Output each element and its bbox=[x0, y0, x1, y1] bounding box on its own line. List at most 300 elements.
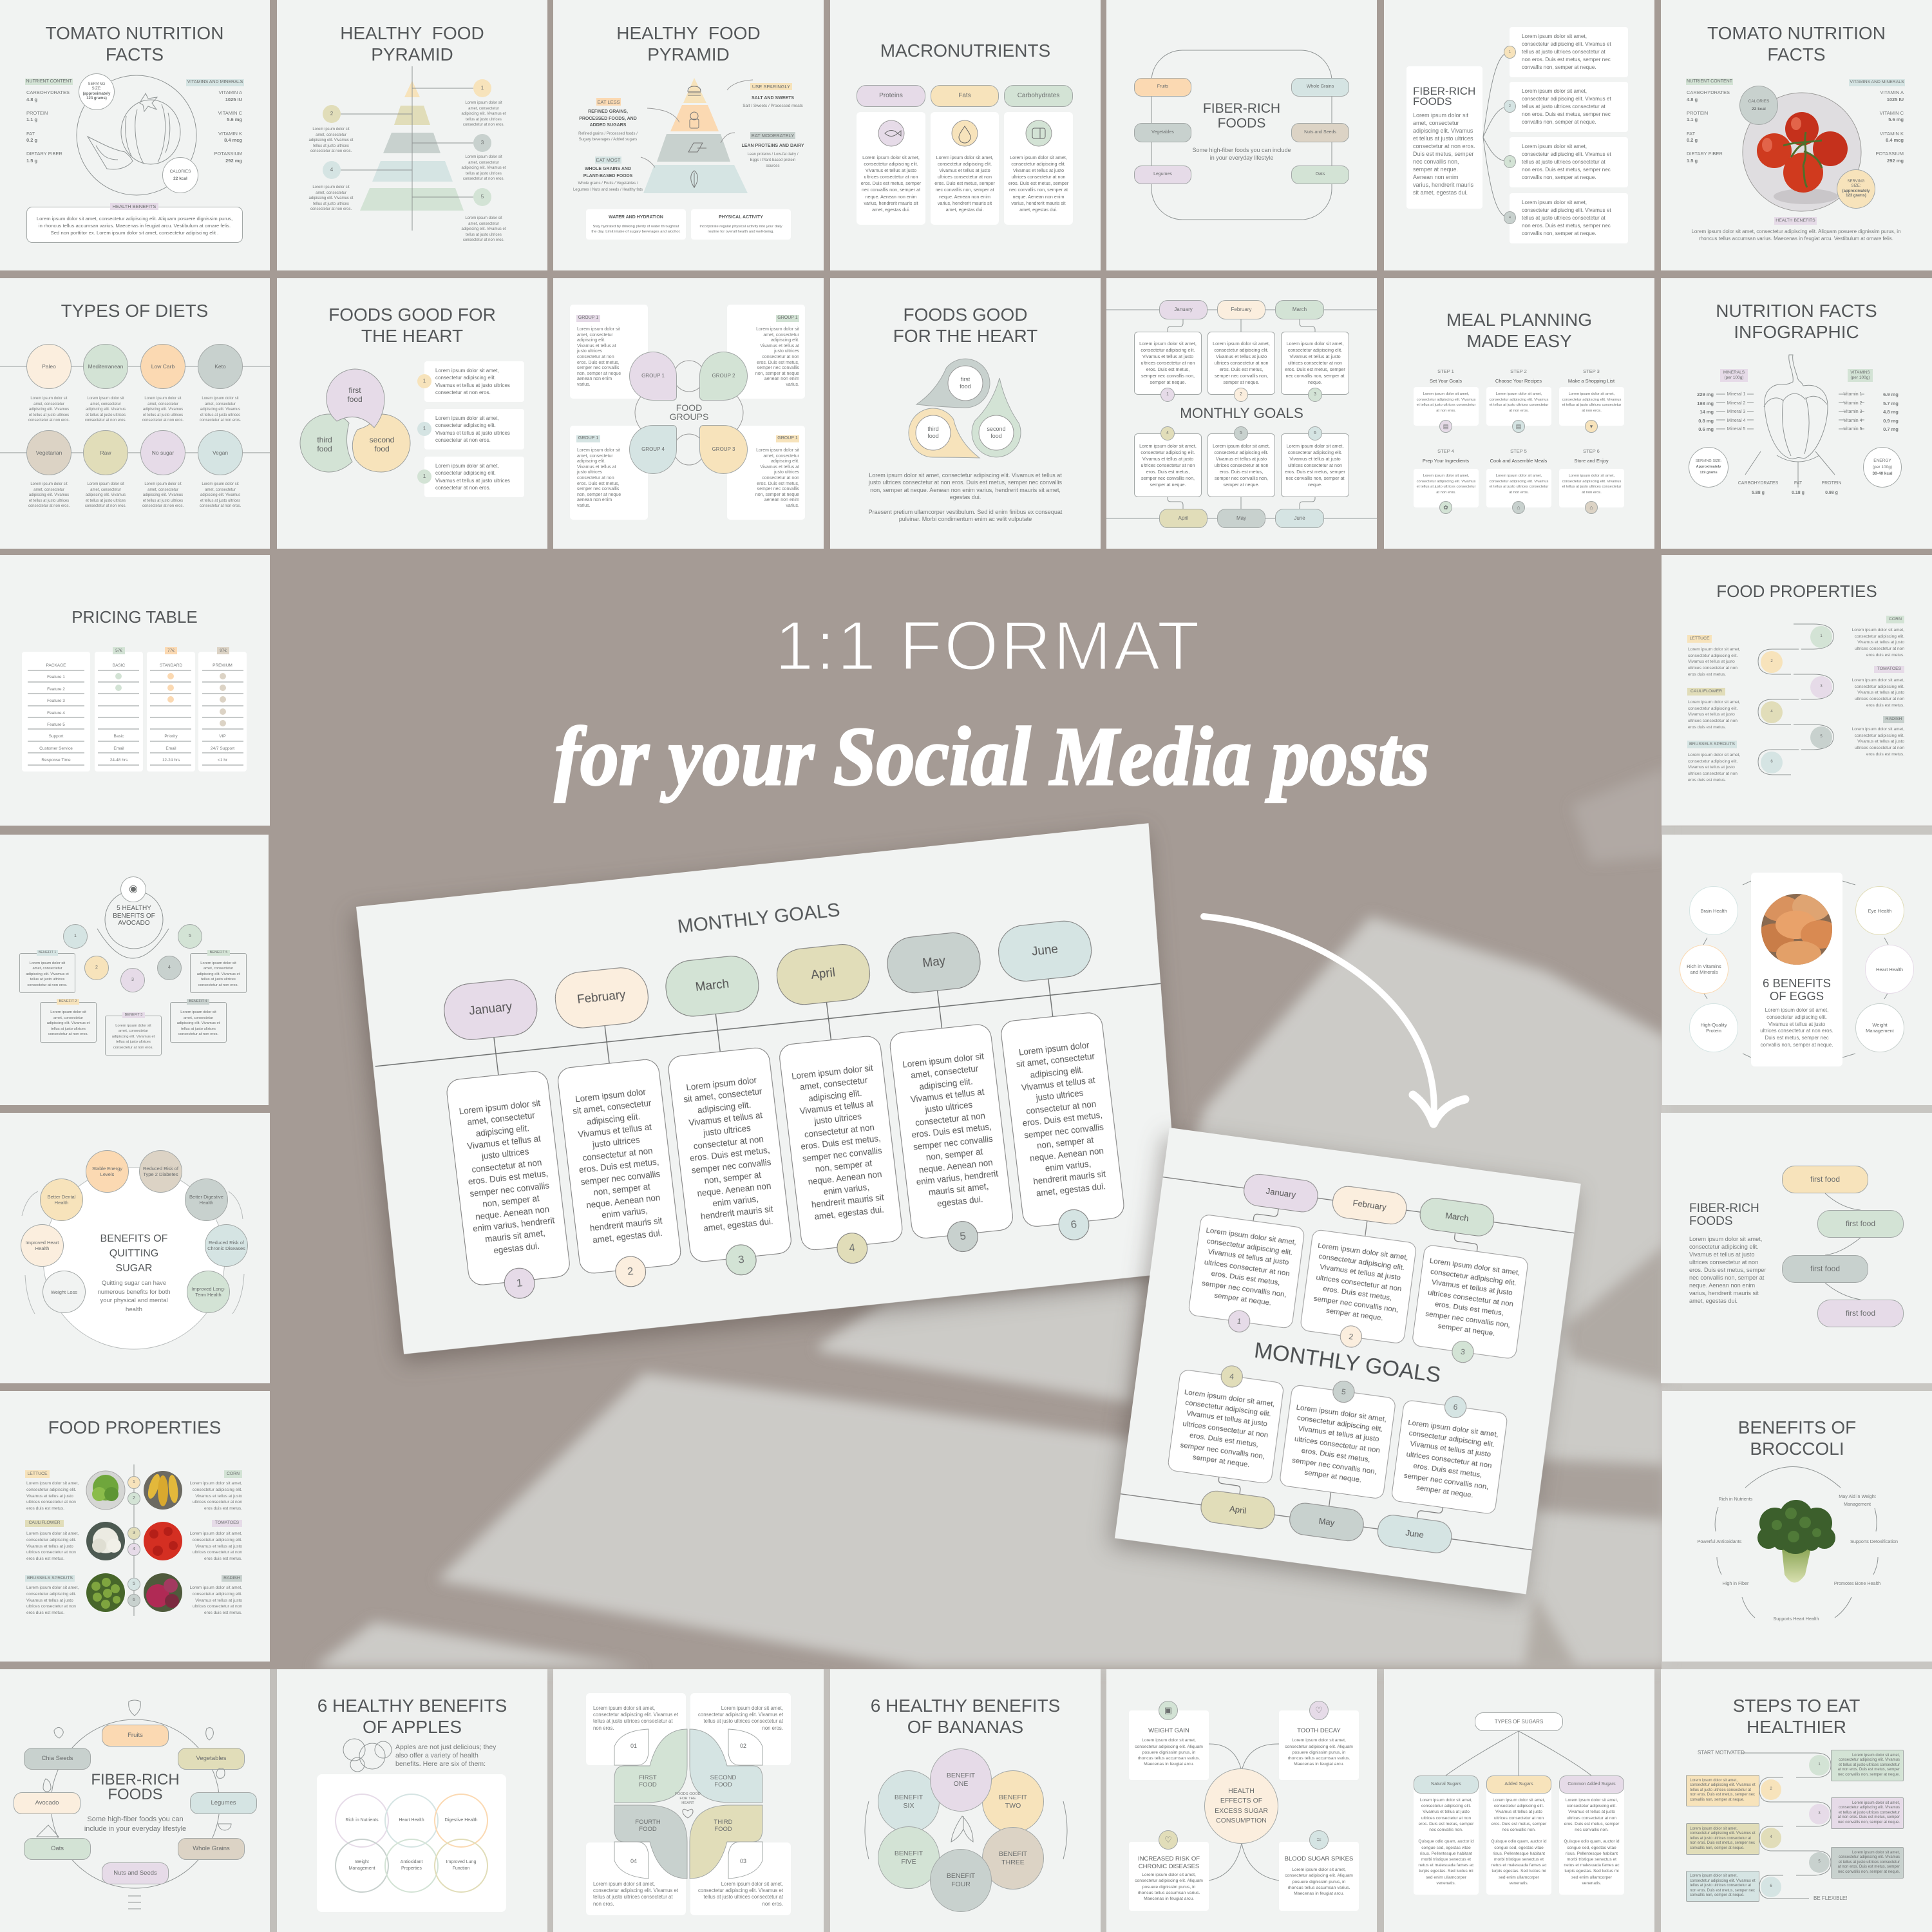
panel: fiber-rich foods cards: convallis non, semper at neque. bbox=[1522, 175, 1596, 180]
month pills: January bbox=[1174, 307, 1193, 312]
health benefits box bbox=[26, 207, 243, 243]
title bbox=[1662, 1417, 1932, 1459]
labels basic: 24-48 hrs bbox=[110, 758, 128, 762]
white circle and arcs bbox=[0, 1113, 270, 1383]
panel: avocado benefits: BENEFIT 2 bbox=[59, 999, 77, 1003]
connectors bbox=[1106, 1669, 1377, 1932]
title: PRICING TABLE bbox=[71, 607, 198, 627]
curves bbox=[1661, 1113, 1931, 1383]
tag: vitamins bbox=[186, 79, 244, 86]
card: proteins: Lorem ipsum dolor sit amet, consectetur adipiscing elit. Vivamus et tellus at justo ultrices consectetur at non eros. Duis est metus, semper nec convallis non, semper at neque. Aenean non enim varius, hendrerit mauris sit amet, egestas dui. bbox=[861, 155, 921, 213]
arc and center circle bbox=[0, 835, 270, 1105]
labels premium: <1 hr bbox=[218, 758, 227, 762]
panel: monthly goals six cards: 5 bbox=[1240, 431, 1242, 435]
panel: food properties loop: consectetur adipiscing elit. bbox=[1688, 759, 1738, 764]
petal shapes bbox=[553, 1669, 824, 1932]
side arcs bbox=[830, 1669, 1101, 1932]
panel: fiber-rich foods loop: Vegetables bbox=[1151, 130, 1174, 135]
nutrient list: 1.5 g bbox=[26, 158, 37, 164]
ring labels: Rich in Nutrients bbox=[345, 1818, 379, 1823]
intro text: varius, hendrerit mauris bbox=[1413, 182, 1473, 188]
panel: fiber-rich foods pills: first food bbox=[1846, 1219, 1875, 1228]
text bbox=[1689, 1235, 1776, 1305]
mockup: landscape monthly goals card: Vivamus et tellus at bbox=[910, 1087, 985, 1104]
text: ultrices consectetur at non eros. bbox=[1760, 1028, 1833, 1034]
title bbox=[1751, 977, 1842, 1003]
intro card bbox=[1406, 66, 1482, 209]
mockup: square monthly goals card: Lorem ipsum dolor sit amet, consectetur adipiscing elit. Vivamus et tellus at justo ultrices consectetur at non eros. Duis est metus, semper nec convallis non, semper at neque. bbox=[1292, 1403, 1387, 1484]
panel: foods good for the heart blobs: 1 bbox=[423, 426, 426, 431]
panel: food properties photos: Lorem ipsum dolor sit amet, bbox=[26, 1586, 79, 1590]
photos: food circles bbox=[86, 1471, 182, 1612]
mockup: landscape monthly goals card: enim varius, bbox=[712, 1194, 759, 1209]
panel: avocado benefits: amet, consectetur bbox=[184, 1016, 213, 1020]
panel: food properties photos: Vivamus et tellus at justo bbox=[26, 1544, 73, 1549]
panel: food properties photos: 3 bbox=[133, 1531, 135, 1535]
step labels lower bbox=[1407, 446, 1484, 466]
connectors bbox=[1384, 0, 1654, 270]
mockup: landscape monthly goals card: adipiscing elit. bbox=[586, 1112, 641, 1126]
panel: healthy food pyramid numbered: adipiscing elit. Vivamus et bbox=[309, 196, 353, 200]
panel: food properties loop: consectetur adipiscing elit. bbox=[1855, 685, 1904, 689]
panel: macronutrients bbox=[830, 0, 1101, 270]
serving bubble: 119 grams bbox=[1700, 471, 1718, 475]
food texts: ultrices consectetur at non bbox=[26, 1500, 76, 1504]
text: neque. Aenean non enim bbox=[1689, 1282, 1755, 1289]
text blocks: amet, consectetur bbox=[468, 107, 499, 111]
tag: vitamins: VITAMINS AND MINERALS bbox=[187, 80, 243, 84]
title: HEALTHIER bbox=[1747, 1717, 1846, 1737]
petal labels bbox=[629, 1774, 667, 1789]
group blobs bbox=[629, 352, 677, 401]
step icons: ▤ bbox=[1443, 423, 1448, 430]
center circle: HEALTH bbox=[1228, 1786, 1255, 1794]
panel: benefits of broccoli: Supports Heart Health bbox=[1773, 1616, 1819, 1622]
panel: benefits of quitting sugar: Reduced Risk of Type 2 Diabetes bbox=[143, 1166, 178, 1177]
salt and sweets bbox=[734, 95, 811, 110]
vitamins list bbox=[1852, 90, 1904, 165]
nutrient list: CARBOHYDRATES bbox=[26, 90, 70, 95]
mockup: landscape monthly goals card: mauris sit amet, bbox=[928, 1182, 989, 1198]
benefit boxes: tellus at justo ultrices bbox=[30, 978, 64, 981]
macro labels: 5.88 g bbox=[1752, 491, 1765, 495]
vitamins list: 8.4 mcg bbox=[224, 137, 242, 143]
panel: food groups bbox=[553, 278, 824, 549]
text blocks: adipiscing elit. Vivamus et bbox=[462, 112, 506, 116]
labels bbox=[952, 375, 978, 391]
panel: types of diets: Lorem ipsum dolor sit bbox=[87, 482, 124, 486]
step cards: Lorem ipsum dolor sit amet, consectetur adipiscing elit. Vivamus et tellus at justo ultrices consectetur at non eros. bbox=[1417, 392, 1475, 412]
nutrient list: 4.8 g bbox=[26, 97, 37, 102]
panel: types of diets: adipiscing elit. Vivamus bbox=[200, 408, 240, 412]
center label bbox=[657, 402, 721, 422]
mockup: landscape monthly goals card: amet, egestas dui. bbox=[703, 1217, 773, 1233]
mockup: landscape monthly goals card: non, semper at bbox=[815, 1159, 873, 1174]
number labels: 01 bbox=[630, 1743, 637, 1749]
panel: avocado benefits bbox=[0, 835, 269, 1105]
labels: first bbox=[348, 386, 361, 395]
headline: for your social media posts: for your Social Media posts bbox=[554, 710, 1430, 803]
mockup: landscape monthly goals card: 5 bbox=[959, 1229, 967, 1242]
panel: food properties photos: consectetur adipiscing elit. bbox=[193, 1592, 242, 1596]
panel: steps to eat healthier: 6 bbox=[1770, 1884, 1772, 1888]
mockup: landscape monthly goals card: adipiscing elit. bbox=[1030, 1065, 1084, 1080]
text: Lorem ipsum dolor sit amet, bbox=[1689, 1236, 1762, 1242]
panel: healthy benefits of bananas: BENEFIT bbox=[947, 1872, 975, 1880]
panel: fiber-rich foods cards: non eros. Duis est metus, semper nec bbox=[1522, 167, 1611, 173]
panel: types of diets: Lorem ipsum dolor sit bbox=[144, 397, 182, 401]
panel: types of diets: Lorem ipsum dolor sit bbox=[202, 482, 239, 486]
mockup: landscape monthly goals card: semper nec convallis bbox=[802, 1145, 882, 1163]
benefit circles bbox=[1689, 886, 1738, 935]
panel: monthly goals six cards: May bbox=[1236, 515, 1246, 521]
tag: health benefits: HEALTH BENEFITS bbox=[1776, 218, 1815, 223]
panel: benefits of quitting sugar: Improved Heart Health bbox=[26, 1240, 59, 1251]
panel: benefits of eggs bbox=[1662, 835, 1932, 1105]
mockup: landscape monthly goals card: non, semper at bbox=[1036, 1135, 1094, 1150]
panel: types of sugars: Lorem ipsum dolor sit amet, consectetur adipiscing elit. Vivamus et tellus at justo ultrices consectetur at non eros. Duis est metus, semper nec convallis non. bbox=[1492, 1798, 1546, 1832]
minerals table: 14 mg bbox=[1700, 409, 1714, 415]
panel: types of sugars bbox=[1384, 1669, 1654, 1932]
center label: GROUPS bbox=[670, 412, 708, 422]
panel: healthy benefits of bananas: THREE bbox=[1001, 1859, 1025, 1866]
panel: steps to eat healthier: Lorem ipsum dolor sit amet, consectetur adipiscing elit. Vivamus et tellus at justo ultrices consectetur at non eros. Duis est metus, semper nec convallis non, semper at neque. bbox=[1838, 1851, 1900, 1874]
title: MEAL PLANNING bbox=[1446, 310, 1592, 330]
text: Vivamus et tellus at justo bbox=[1768, 1021, 1825, 1027]
panel: foods good for the heart teardrops: food bbox=[927, 433, 939, 439]
panel: healthy benefits of bananas: BENEFIT bbox=[999, 1794, 1027, 1801]
panel: foods good for the heart quadrants: 03 bbox=[740, 1858, 746, 1864]
subtitle: Quitting sugar can have numerous benefits for both your physical and mental health bbox=[97, 1280, 170, 1313]
text blocks: tellus at justo ultrices bbox=[466, 118, 502, 122]
mockup: landscape monthly goals card: justo ultrices bbox=[925, 1100, 973, 1115]
panel: health effects of excess sugar bbox=[1106, 1669, 1377, 1932]
labels: first bbox=[961, 376, 970, 383]
center outlines bbox=[553, 278, 824, 549]
right texts bbox=[1840, 627, 1904, 659]
panel: food groups: GROUP 2 bbox=[712, 373, 735, 379]
panel: types of diets: Lorem ipsum dolor sit bbox=[30, 482, 68, 486]
panel: nutrition facts pepper: 0.98 g bbox=[1825, 491, 1838, 495]
whole grains: Legumes / Nuts and seeds / Healthy fats bbox=[573, 188, 643, 192]
panel: foods good for the heart teardrops: second bbox=[987, 426, 1006, 432]
panel: types of diets: Lorem ipsum dolor sit bbox=[202, 397, 239, 401]
panel: benefits of broccoli: Powerful Antioxidants bbox=[1698, 1539, 1741, 1544]
panel: nutrition facts pepper: Mineral 4 bbox=[1727, 419, 1745, 422]
mockup: landscape monthly goals card: neque. Aenean non bbox=[808, 1169, 882, 1186]
lean proteins bbox=[731, 143, 815, 169]
column basic bbox=[95, 652, 143, 772]
title bbox=[340, 23, 484, 64]
panel: food properties loop: 2 bbox=[1770, 659, 1773, 663]
goal cards: Lorem ipsum dolor sit bbox=[459, 1098, 541, 1116]
step labels: Set Your Goals bbox=[1430, 378, 1462, 384]
columns bbox=[1414, 1782, 1479, 1895]
center label: FOOD bbox=[676, 402, 702, 413]
panel: food properties photos: eros duis est metus. bbox=[26, 1557, 64, 1561]
panel: healthy food pyramid numbered: Lorem ipsum dolor sit bbox=[465, 216, 502, 220]
goal cards: consectetur at non bbox=[471, 1157, 542, 1175]
title: FOODS bbox=[108, 1786, 163, 1803]
panel: types of diets: Low Carb bbox=[151, 363, 175, 370]
title: FACTS bbox=[1767, 44, 1826, 64]
panel: foods good for the heart quadrants: FOOD bbox=[639, 1826, 657, 1833]
intro text: consectetur at non eros. bbox=[1413, 143, 1475, 149]
title: OF BANANAS bbox=[907, 1717, 1023, 1737]
calories bubble bbox=[1739, 86, 1778, 125]
effect cards bbox=[1129, 1710, 1209, 1780]
start label: START MOTIVATED bbox=[1698, 1750, 1745, 1756]
mockup: landscape monthly goals card: 2 bbox=[627, 1265, 634, 1278]
panel: benefits of quitting sugar: Improved Long-Term Health bbox=[191, 1286, 225, 1298]
panel: food properties photos: RADISH bbox=[223, 1576, 240, 1580]
refined grains: REFINED GRAINS, bbox=[588, 109, 628, 114]
tag: nutrient content bbox=[1686, 79, 1733, 85]
title bbox=[830, 1695, 1101, 1738]
panel: fiber-rich foods pills: first food bbox=[1810, 1264, 1840, 1273]
panel: foods good for the heart blobs: consectetur at non eros. bbox=[435, 485, 491, 491]
month pills lower bbox=[1159, 509, 1208, 528]
panel: fiber-rich foods cards: convallis non, semper at neque. bbox=[1522, 231, 1596, 236]
title bbox=[86, 1231, 182, 1276]
panel: avocado benefits: amet, consectetur bbox=[118, 1029, 148, 1033]
panel: healthy benefits of bananas: BENEFIT bbox=[999, 1850, 1027, 1858]
energy bubble: ENERGY bbox=[1873, 459, 1891, 462]
number circles: 1 bbox=[516, 1276, 523, 1289]
panel: types of diets bbox=[0, 278, 270, 549]
mockup: landscape monthly goals card: Lorem ipsum dolor sit bbox=[791, 1063, 873, 1081]
panel: steps to eat healthier: Lorem ipsum dolor sit amet, consectetur adipiscing elit. Vivamus et tellus at justo ultrices consectetur at non eros. Duis est metus, semper nec convallis non, semper at neque. bbox=[1838, 1801, 1900, 1824]
panel: healthy food pyramid numbered: consectetur at non eros. bbox=[463, 238, 504, 242]
panel: types of diets: consectetur at non eros. bbox=[200, 419, 241, 422]
panel: types of diets: et tellus at justo ultrices bbox=[143, 499, 183, 503]
diet descriptions: consectetur at non eros. bbox=[28, 419, 70, 422]
panel: healthy food pyramid numbered: Lorem ipsum dolor sit bbox=[312, 185, 350, 189]
step cards lower bbox=[1414, 469, 1479, 507]
mockup: square monthly goals card: Lorem ipsum dolor sit amet, consectetur adipiscing elit. Vivamus et tellus at justo ultrices consectetur at non eros. Duis est metus, semper nec convallis non, semper at neque. bbox=[1403, 1419, 1499, 1499]
labels package: Support bbox=[49, 734, 63, 739]
vitamins table: Vitamin 1 bbox=[1843, 392, 1862, 397]
mockup: landscape monthly goals card: semper nec convallis bbox=[691, 1157, 772, 1175]
benefit text: Lorem ipsum dolor sit amet, consectetur adipiscing elit. Aliquam posuere dignissim purus, in rhoncus tellus accumsan varius. Maecenas in feugiat arcu. Vestibulum at ornare felis. bbox=[1691, 229, 1901, 242]
panel: healthy benefits of bananas: TWO bbox=[1005, 1802, 1021, 1810]
panel: avocado benefits: tellus at justo ultrices bbox=[51, 1027, 86, 1031]
panel: healthy food pyramid numbered: tellus at justo ultrices bbox=[466, 233, 502, 237]
calories bubble: 22 kcal bbox=[1752, 107, 1766, 111]
serving bubble bbox=[1689, 447, 1728, 488]
panel: monthly goals six cards: 2 bbox=[1240, 392, 1242, 397]
title: STEPS TO EAT bbox=[1733, 1696, 1860, 1716]
tag: nutrient content bbox=[25, 79, 73, 85]
nutrient list: 0.2 g bbox=[26, 137, 37, 143]
headline: 1:1 format: 1:1 FORMAT bbox=[775, 607, 1200, 685]
panel: healthy food pyramid numbered: tellus at justo ultrices bbox=[313, 202, 349, 206]
right texts: Lorem ipsum dolor sit amet, bbox=[1852, 628, 1904, 632]
panel: types of diets: consectetur at non eros. bbox=[142, 419, 184, 422]
item cards: convallis non, semper at neque. bbox=[1522, 64, 1596, 70]
panel: food properties loop: consectetur adipiscing elit. bbox=[1688, 706, 1738, 711]
mockup: landscape monthly goals card: enim varius, bbox=[1045, 1159, 1092, 1173]
panel: nutrition facts pepper: Mineral 2 bbox=[1727, 401, 1745, 406]
title: MACRONUTRIENTS bbox=[880, 41, 1050, 61]
panel: food properties loop: CAULIFLOWER bbox=[1690, 689, 1722, 694]
icon: banana bbox=[830, 1669, 1101, 1932]
panel: healthy food pyramid numbered: 5 bbox=[481, 194, 484, 200]
panel: meal planning: Lorem ipsum dolor sit amet, consectetur adipiscing elit. Vivamus et tellus at justo ultrices consectetur at non eros. bbox=[1562, 474, 1621, 495]
panel: healthy food pyramid numbered: adipiscing elit. Vivamus et bbox=[309, 138, 353, 142]
step circles bbox=[1809, 1755, 1830, 1776]
panel: health effects of excess sugar: Lorem ipsum dolor sit amet, consectetur adipiscing elit. Aliquam posuere dignissim purus, in rhoncus tellus accumsan varius. Maecenas in feugiat arcu. bbox=[1285, 1738, 1353, 1766]
panel: types of diets: Vegan bbox=[213, 450, 228, 456]
goal cards: Vivamus et tellus at bbox=[466, 1133, 541, 1151]
panel: fiber-rich foods ring bbox=[0, 1669, 270, 1932]
panel: monthly goals six cards: June bbox=[1294, 515, 1305, 521]
mockup: square monthly goals card: February bbox=[1352, 1198, 1387, 1212]
panel: food properties loop: eros duis est metus. bbox=[1688, 725, 1726, 730]
tag: vitamins: (per 100g) bbox=[1851, 375, 1870, 380]
panel: healthy food pyramid numbered: consectetur at non eros. bbox=[310, 207, 352, 211]
panel: food groups: Lorem ipsum dolor sit amet, consectetur adipiscing elit. Vivamus et tellus at justo ultrices consectetur at non eros. Duis est metus, semper nec convallis non, semper at neque aenean non enim varius. bbox=[755, 327, 799, 387]
labels basic bbox=[95, 660, 143, 767]
mockup: landscape monthly goals card: Lorem ipsum dolor bbox=[1018, 1040, 1090, 1057]
pyramid chart bbox=[341, 66, 473, 231]
panel: fiber-rich foods ring: Avocado bbox=[35, 1799, 59, 1806]
vitamins table: Vitamin 3 bbox=[1843, 410, 1862, 414]
intro text: Aenean non enim bbox=[1413, 174, 1459, 180]
panel: food properties loop: 3 bbox=[1820, 685, 1823, 688]
panel: meal planning: Choose Your Recipes bbox=[1495, 378, 1542, 384]
panel: foods good for the heart teardrops bbox=[830, 278, 1101, 549]
loop outline bbox=[1106, 0, 1377, 270]
panel: types of sugars: Added Sugars bbox=[1504, 1782, 1533, 1786]
mockup: square monthly goals card bbox=[1115, 1128, 1581, 1594]
month pills: January bbox=[1265, 1186, 1296, 1200]
intro text: Duis est metus, semper bbox=[1413, 151, 1474, 157]
panel: types of diets: consectetur at non eros. bbox=[142, 504, 184, 508]
panel: meal planning: Cook and Assemble Meals bbox=[1490, 458, 1547, 464]
panel: healthy benefits of apples: Weight bbox=[355, 1860, 369, 1864]
title: FOODS bbox=[1689, 1215, 1733, 1228]
panel: food properties photos: consectetur adipiscing elit. bbox=[26, 1538, 76, 1542]
panel: types of diets: et tellus at justo ultrices bbox=[29, 499, 69, 503]
cards bbox=[424, 361, 524, 402]
mockup: landscape monthly goals card: neque. Aenean non bbox=[918, 1157, 993, 1175]
panel: healthy benefits of bananas bbox=[830, 1669, 1101, 1932]
number circles lower bbox=[1220, 1364, 1244, 1389]
panel: healthy food pyramid numbered: Lorem ipsum dolor sit bbox=[465, 155, 502, 159]
whole grains: PLANT-BASED FOODS bbox=[583, 174, 632, 178]
title bbox=[1661, 23, 1932, 65]
number circles: 1 bbox=[423, 378, 426, 384]
panel: foods good for the heart quadrants: Lorem ipsum dolor sit amet, consectetur adipiscing elit. Vivamus et tellus at justo ultrices consectetur at non eros. bbox=[698, 1881, 783, 1907]
serving size bubble: SIZE: bbox=[91, 87, 102, 91]
mockup: landscape monthly goals card: amet, consectetur bbox=[910, 1064, 979, 1081]
panel: fiber-rich foods loop: Whole Grains bbox=[1307, 84, 1334, 89]
food pills: Fruits bbox=[128, 1732, 143, 1739]
price tags bbox=[113, 647, 125, 654]
panel: types of sugars: Quisque odio quam, auctor id congue sed, egestas vitae risus. Pellentesque habitant morbi tristique senectus et netus et malesuada fames ac turpis egestas. Sed luctus mi sed enim ullamcorper venenatis. bbox=[1491, 1839, 1547, 1886]
panel: food properties loop: TOMATOES bbox=[1877, 667, 1901, 671]
panel: meal planning: Lorem ipsum dolor sit amet, consectetur adipiscing elit. Vivamus et tellus at justo ultrices consectetur at non eros. bbox=[1490, 392, 1548, 412]
end label: BE FLEXIBLE! bbox=[1814, 1895, 1847, 1901]
whole grains: Whole grains / Fruits / Vegetables / bbox=[578, 182, 638, 185]
title: THE HEART bbox=[361, 326, 463, 346]
panel: food properties photos: Lorem ipsum dolor sit amet, bbox=[190, 1586, 242, 1590]
panel: foods good for the heart blobs bbox=[277, 278, 547, 549]
vitamins list: VITAMIN C bbox=[1880, 110, 1904, 116]
center caption: FOODS GOOD FOR THE HEART bbox=[675, 1792, 701, 1805]
serving size bubble: 123 grams) bbox=[1846, 194, 1866, 198]
panel: nutrition facts pepper: Mineral 1 bbox=[1727, 392, 1745, 397]
panel: food properties photos: BRUSSELS SPROUTS bbox=[27, 1576, 73, 1580]
panel: food properties loop: ultrices consectetur at non bbox=[1855, 697, 1904, 701]
panel: foods good for the heart blobs: consectetur at non eros. bbox=[435, 437, 491, 443]
card: carbohydrates bbox=[1004, 112, 1073, 225]
food texts: Vivamus et tellus at justo bbox=[26, 1494, 73, 1499]
panel: avocado benefits: adipiscing elit. Vivamus et bbox=[47, 1021, 90, 1025]
labels basic: Basic bbox=[114, 734, 124, 739]
title: BENEFITS OF bbox=[100, 1233, 167, 1244]
title: QUITTING bbox=[109, 1248, 158, 1259]
panel: healthy food pyramid numbered: 4 bbox=[330, 167, 333, 173]
labels package: Customer Service bbox=[39, 746, 73, 751]
month pills bbox=[1242, 1172, 1320, 1214]
panel: foods good for the heart blobs: Vivamus et tellus at justo ultrices bbox=[435, 430, 510, 435]
title: FOR THE HEART bbox=[893, 326, 1037, 346]
mockup: landscape monthly goals card: eros. Duis est metus, bbox=[1022, 1110, 1103, 1128]
title: FOOD PROPERTIES bbox=[48, 1417, 221, 1437]
item cards: non eros. Duis est metus, semper nec bbox=[1522, 57, 1611, 62]
panel: benefits of broccoli: May Aid in Weight bbox=[1839, 1493, 1876, 1499]
item cards: consectetur adipiscing elit. Vivamus et bbox=[1522, 41, 1611, 47]
refined grains: Sugary beverages / Added sugars bbox=[579, 138, 637, 142]
vitamins list: VITAMIN K bbox=[218, 131, 242, 137]
left texts: ultrices consectetur at non bbox=[1688, 666, 1738, 670]
panel: meal planning: STEP 6 bbox=[1583, 448, 1600, 454]
numbered nodes: 1 bbox=[481, 85, 484, 91]
tag: eat moderately: EAT MODERATELY bbox=[752, 133, 794, 138]
labels package: PACKAGE bbox=[46, 663, 66, 668]
title: 6 HEALTHY BENEFITS bbox=[317, 1696, 507, 1716]
lean proteins: LEAN PROTEINS AND DAIRY bbox=[741, 144, 804, 148]
panel: monthly goals six cards: 6 bbox=[1314, 431, 1316, 435]
goal cards: semper nec convallis bbox=[469, 1180, 550, 1198]
panel: avocado benefits: tellus at justo ultrices bbox=[116, 1040, 151, 1044]
serving size bubble: (approximately bbox=[1842, 189, 1870, 193]
panel: avocado benefits: tellus at justo ultrices bbox=[181, 1027, 216, 1031]
panel: foods good for the heart quadrants bbox=[553, 1669, 824, 1932]
health benefits box: Sed non porttitor ex. Lorem ipsum dolor sit amet, consectetur adipiscing elit . bbox=[51, 230, 218, 236]
panel: monthly goals six cards bbox=[1106, 278, 1377, 549]
labels standard: 12-24 hrs bbox=[162, 758, 180, 762]
panel: healthy food pyramid numbered: amet, consectetur bbox=[316, 133, 346, 137]
goal cards: eros. Duis est metus, bbox=[468, 1169, 549, 1187]
cards: consectetur adipiscing elit. bbox=[435, 375, 496, 381]
pills: first food bbox=[1810, 1175, 1840, 1184]
mockup: square monthly goals card: Lorem ipsum dolor sit amet, consectetur adipiscing elit. Vivamus et tellus at justo ultrices consectetur at non eros. Duis est metus, semper nec convallis non, semper at neque. bbox=[1425, 1257, 1520, 1338]
mockup: landscape monthly goals card: semper nec convallis bbox=[580, 1169, 661, 1187]
text: Vivamus et tellus at justo bbox=[1689, 1251, 1754, 1258]
text: nec convallis non, semper at bbox=[1689, 1274, 1764, 1281]
food texts bbox=[26, 1481, 91, 1512]
diet descriptions bbox=[23, 396, 75, 424]
right texts: consectetur adipiscing elit. bbox=[1855, 634, 1904, 639]
labels package: Feature 3 bbox=[47, 699, 65, 703]
mockup: landscape monthly goals card: Vivamus et tellus at bbox=[688, 1110, 763, 1128]
panel: fiber-rich foods ring: Chia Seeds bbox=[41, 1755, 73, 1762]
panel: meal planning: Lorem ipsum dolor sit amet, consectetur adipiscing elit. Vivamus et tellus at justo ultrices consectetur at non eros. bbox=[1562, 392, 1621, 412]
mockup: landscape monthly goals card: 4 bbox=[848, 1242, 856, 1254]
